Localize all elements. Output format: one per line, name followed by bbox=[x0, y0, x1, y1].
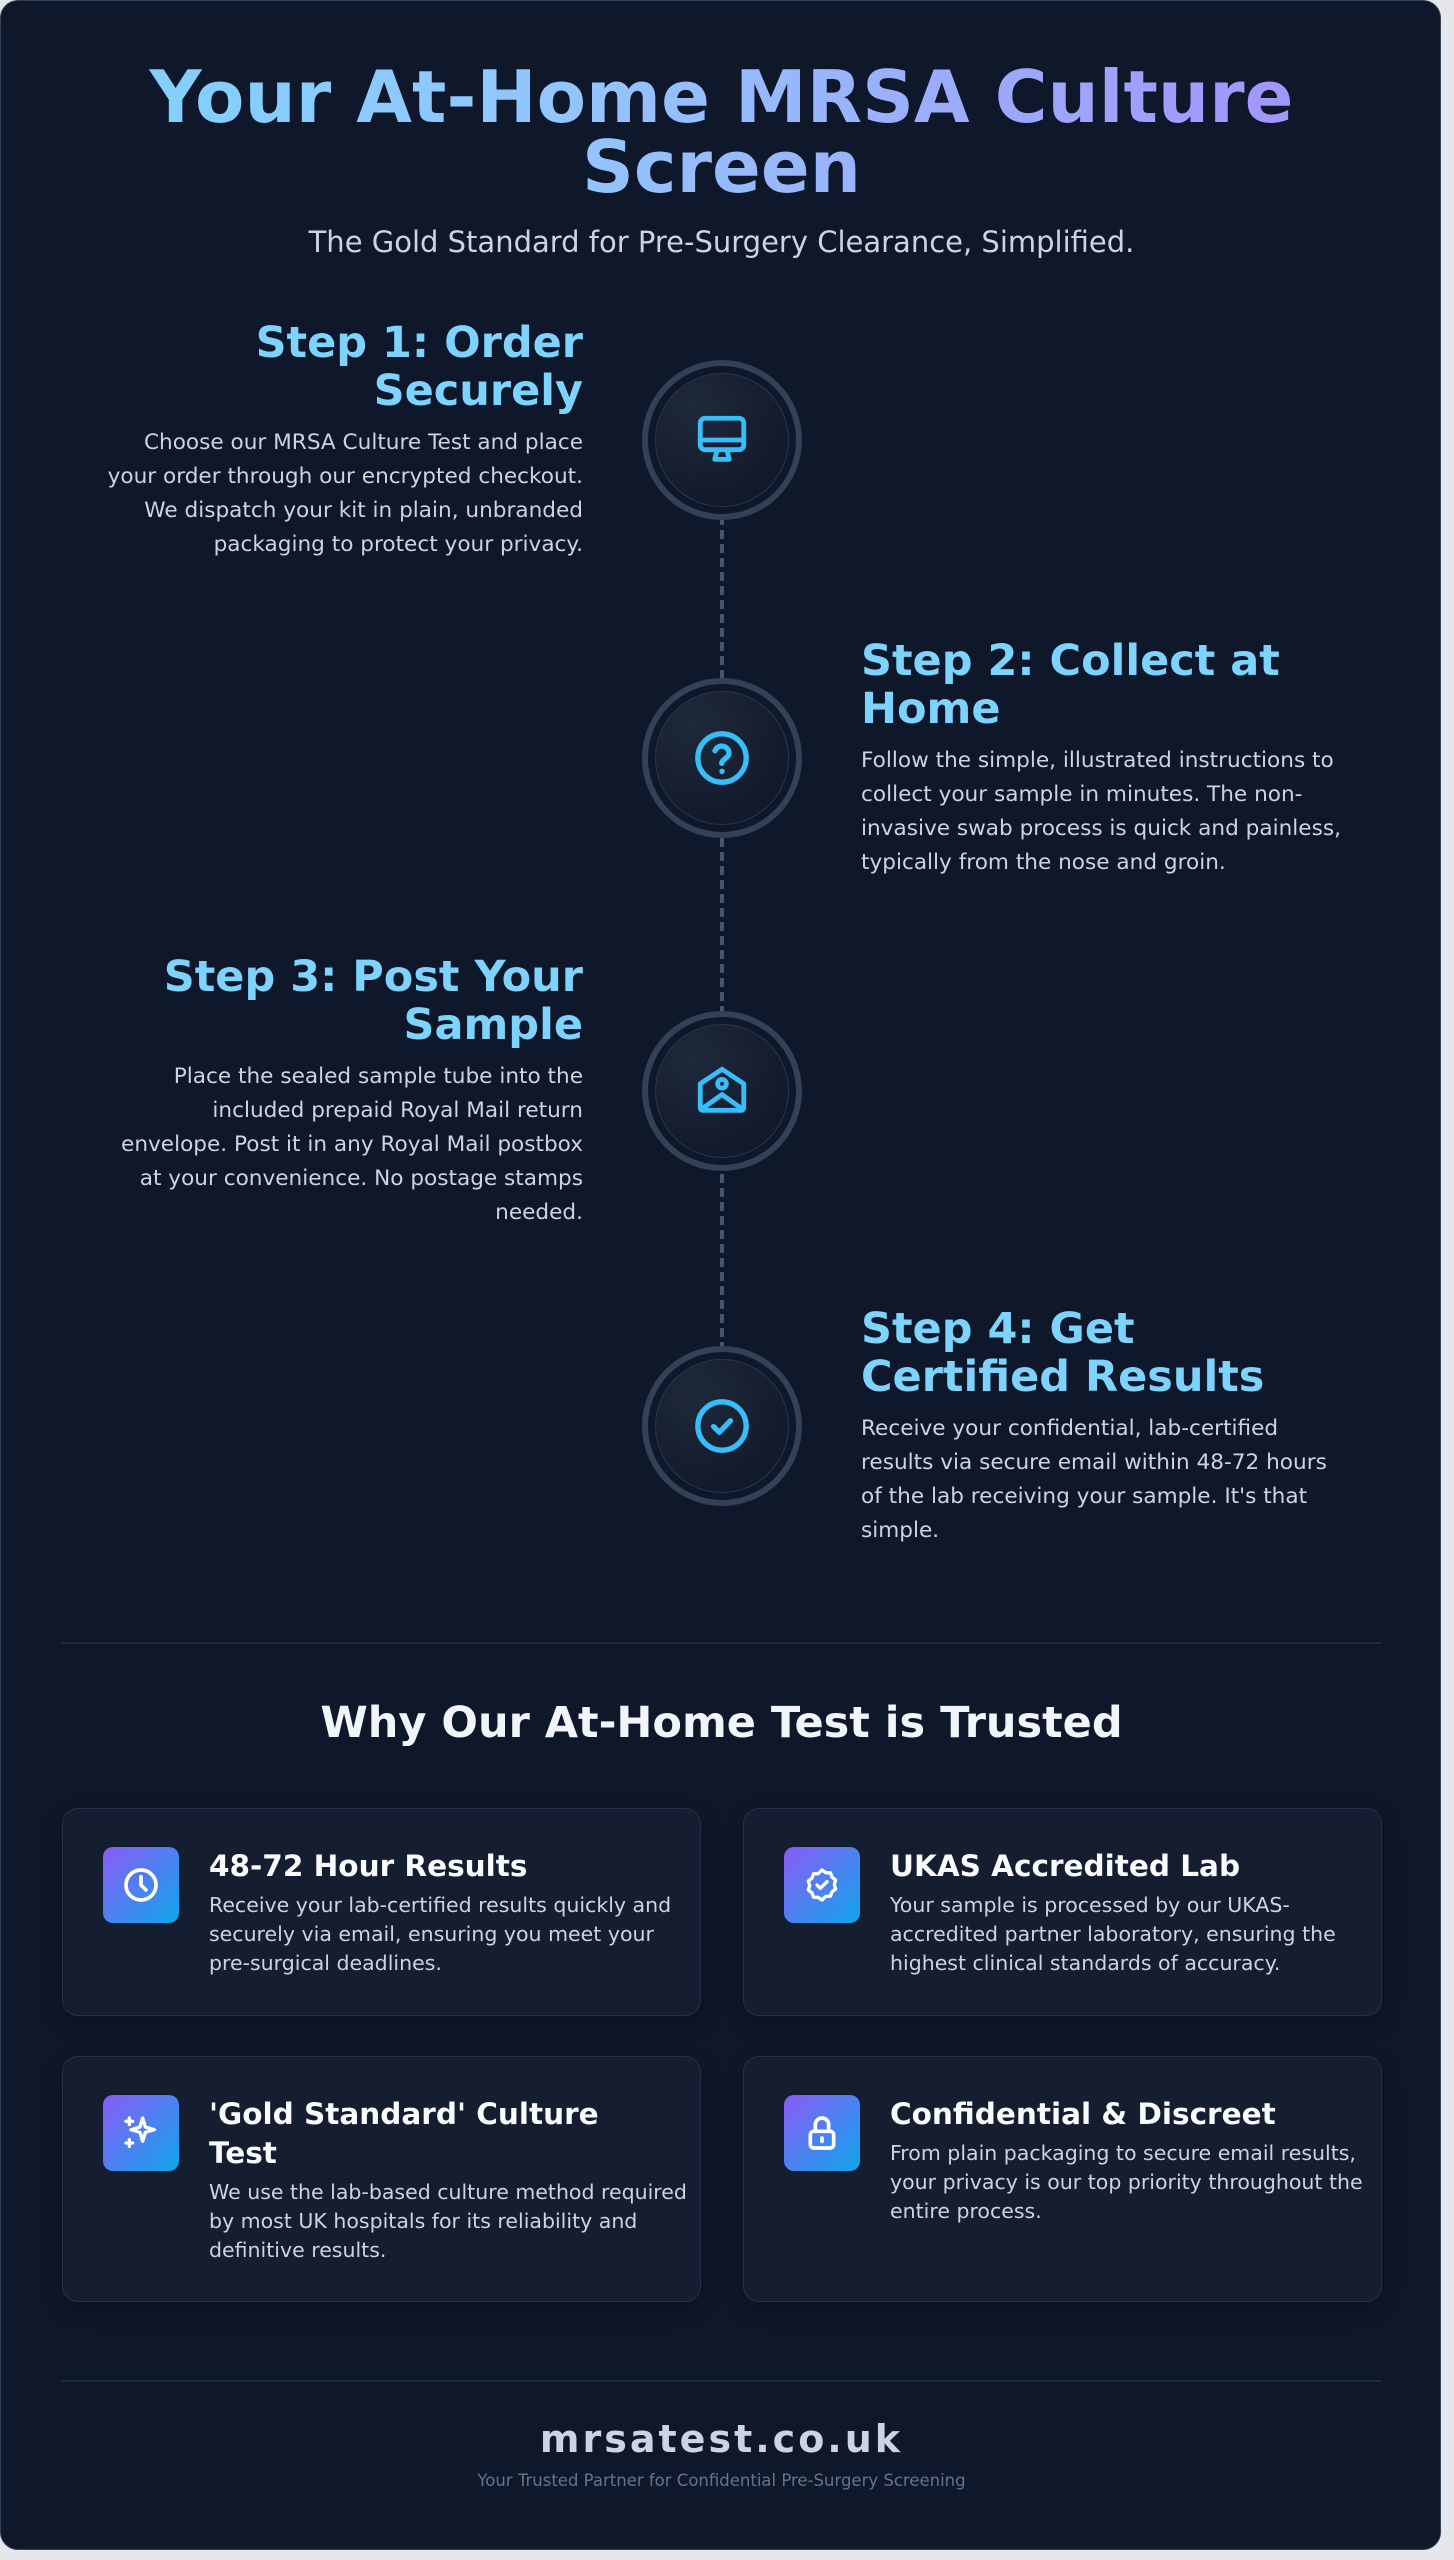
footer tagline: Your Trusted Partner for Confidential Pre-Surgery Screening bbox=[477, 2471, 966, 2490]
card: confidential: Confidential & Discreet bbox=[890, 2097, 1276, 2131]
step 3 text: Step 3: Post Your Sample bbox=[164, 952, 583, 1050]
icon: badge check bbox=[784, 1847, 860, 1923]
section heading: trusted: Why Our At-Home Test is Trusted bbox=[320, 1698, 1123, 1748]
step 3 text bbox=[121, 952, 583, 1224]
card: confidential: From plain packaging to secure email results, your privacy is our top priority throughout the entire process. bbox=[890, 2141, 1363, 2223]
card: gold standard: Test bbox=[209, 2136, 277, 2170]
card: UKAS bbox=[743, 1808, 1382, 2016]
icon: clock bbox=[103, 1847, 179, 1923]
step 2 text bbox=[861, 636, 1341, 874]
icon: monitor bbox=[642, 360, 802, 520]
card: UKAS: UKAS Accredited Lab bbox=[890, 1849, 1240, 1883]
step 2 text: Step 2: Collect at Home bbox=[861, 636, 1280, 734]
footer brand: mrsatest.co.uk bbox=[540, 2417, 903, 2461]
step 4 text: Receive your confidential, lab-certified results via secure email within 48-72 hours of the lab receiving your sample. It's that simple. bbox=[861, 1416, 1327, 1542]
step 4 text bbox=[861, 1304, 1327, 1542]
step 4 text: Step 4: Get Certified Results bbox=[861, 1304, 1264, 1402]
subtitle: The Gold Standard for Pre-Surgery Clearance, Simplified. bbox=[309, 225, 1134, 259]
step 2 text: Follow the simple, illustrated instructions to collect your sample in minutes. The non-invasive swab process is quick and painless, typically from the nose and groin. bbox=[861, 748, 1341, 874]
card: gold standard bbox=[62, 2056, 701, 2302]
card: 48-72 hour results: 48-72 Hour Results bbox=[209, 1849, 527, 1883]
icon: lock bbox=[784, 2095, 860, 2171]
card: gold standard: 'Gold Standard' Culture bbox=[209, 2097, 599, 2131]
card: UKAS: Your sample is processed by our UKAS-accredited partner laboratory, ensuring the highest clinical standards of accuracy. bbox=[890, 1893, 1336, 1975]
step 3 text: Place the sealed sample tube into the included prepaid Royal Mail return envelope. Post it in any Royal Mail postbox at your convenience. No postage stamps needed. bbox=[121, 1064, 583, 1224]
card: gold standard: We use the lab-based culture method required by most UK hospitals for its reliability and definitive results. bbox=[209, 2180, 687, 2262]
timeline dashed line bbox=[720, 520, 724, 1346]
step 1 text: Step 1: Order Securely bbox=[256, 318, 583, 416]
card: 48-72 hour results bbox=[62, 1808, 701, 2016]
title: Your At-Home MRSA Culture Screen bbox=[149, 55, 1294, 209]
step 1 text bbox=[108, 318, 583, 556]
card: 48-72 hour results: Receive your lab-certified results quickly and securely via email, ensuring you meet your pre-surgical deadlines. bbox=[209, 1893, 671, 1975]
step 1 text: Choose our MRSA Culture Test and place your order through our encrypted checkout. We dispatch your kit in plain, unbranded packaging to protect your privacy. bbox=[108, 430, 583, 556]
icon: envelope bbox=[642, 1011, 802, 1171]
card: confidential bbox=[743, 2056, 1382, 2302]
icon: sparkles bbox=[103, 2095, 179, 2171]
icon: question bbox=[642, 678, 802, 838]
icon: check circle bbox=[642, 1346, 802, 1506]
